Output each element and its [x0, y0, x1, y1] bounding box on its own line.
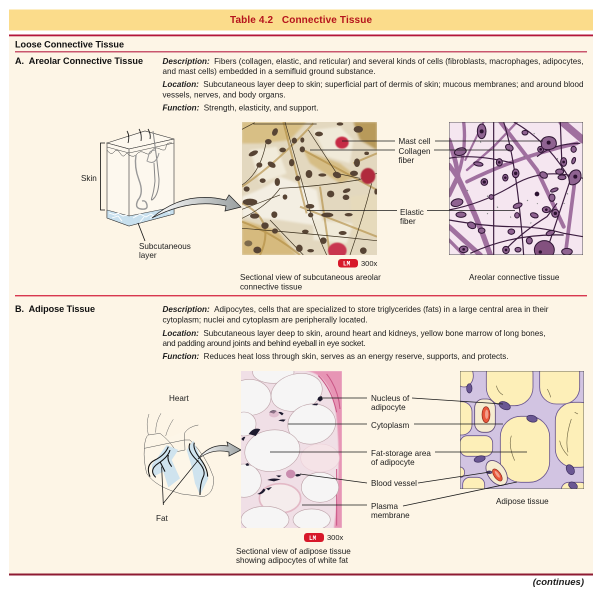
- label: fat: Fat: [156, 514, 168, 523]
- text block: areolar description: [162, 57, 584, 112]
- bracket: [100, 143, 105, 210]
- title banner: [9, 10, 593, 30]
- leader: fat storage: [270, 451, 527, 453]
- label: collagen fiber: fiber: [398, 156, 415, 165]
- label: fat-storage area: Fat-storage area: [371, 449, 431, 458]
- heading: loose connective tissue: Loose Connective Tissue: [15, 40, 124, 50]
- illustration: areolar connective tissue: [449, 122, 583, 259]
- label: collagen fiber: Collagen: [398, 147, 430, 156]
- label: skin: Skin: [81, 174, 97, 183]
- heading rule: [15, 51, 587, 52]
- badge: LM 300x areolar: 300x: [361, 259, 378, 268]
- fat deposits: [152, 445, 180, 487]
- label: elastic fiber: fiber: [400, 217, 416, 226]
- callouts: adipose labels: [270, 398, 527, 506]
- caption: adipose micrograph: Sectional view of adipose tissue: [236, 547, 351, 556]
- skin diagram: [81, 129, 191, 260]
- callouts: areolar labels: [307, 141, 543, 210]
- text block: adipose description: [162, 305, 549, 361]
- photo: areolar micrograph: [242, 122, 378, 259]
- text block: adipose description: Function: Reduces heat loss through skin, serves as an energy reserve, supports, and protects.: [162, 352, 508, 361]
- leader: blood vessel: [300, 472, 490, 483]
- leader: cytoplasm: [288, 423, 503, 425]
- text block: adipose description: and padding around joints and behind eyeball in eye socket.: [162, 339, 366, 348]
- bottom rule: [9, 574, 593, 576]
- fat pointers: [162, 460, 198, 505]
- text block: adipose description: cytoplasm; nuclei and cytoplasm are peripherally located.: [162, 316, 368, 324]
- label: nucleus of adipocyte: Nucleus of: [371, 394, 409, 403]
- text block: areolar description: Function: Strength, elasticity, and support.: [162, 104, 318, 112]
- heart diagram: [144, 394, 214, 523]
- mast cells: [328, 137, 375, 259]
- label: nucleus of adipocyte: adipocyte: [371, 403, 406, 412]
- label: subcutaneous layer: Subcutaneous: [139, 242, 191, 251]
- text block: adipose description: Location: Subcutaneous layer deep to skin, around heart and kidneys, yellow bone marrow of long bones,: [162, 329, 546, 338]
- caption: areolar micrograph: Sectional view of subcutaneous areolar: [240, 273, 381, 282]
- badge: LM 300x adipose: LM: [309, 535, 317, 542]
- label: plasma membrane: Plasma: [371, 502, 398, 511]
- leader: collagen fiber: [310, 149, 510, 151]
- badge: LM 300x areolar: LM: [343, 261, 351, 268]
- section divider: [15, 295, 587, 296]
- illustration: adipose tissue: [460, 371, 584, 489]
- photo: adipose micrograph: [241, 371, 342, 528]
- leader: mast cell: [342, 140, 543, 142]
- caption: adipose illustration: Adipose tissue: [496, 497, 549, 506]
- arrow: skin to micrograph: [152, 195, 241, 218]
- text block: areolar description: and mast cells) embedded in a semifluid ground substance.: [162, 67, 376, 76]
- continues note: (continues): [533, 577, 584, 588]
- subcutaneous layer of skin block: [107, 207, 174, 226]
- heading: adipose tissue: B. Adipose Tissue: [15, 304, 95, 314]
- label: subcutaneous layer: layer: [139, 251, 157, 260]
- leader: elastic fiber: [307, 210, 515, 212]
- arrow: heart to micrograph: [198, 442, 241, 459]
- badge: LM 300x areolar: [338, 259, 378, 268]
- heading: areolar connective tissue: A. Areolar Connective Tissue: [15, 56, 143, 66]
- heart outline: [144, 425, 214, 497]
- badge: LM 300x adipose: 300x: [327, 533, 344, 542]
- label: mast cell: Mast cell: [398, 137, 431, 146]
- text block: areolar description: Description: Fibers (collagen, elastic, and reticular) and several kinds of cells (fibroblasts, macrophages, adipocytes,: [162, 57, 584, 66]
- text block: areolar description: Location: Subcutaneous layer deep to skin; superficial part of dermis of skin; mucous membranes; and around blood: [162, 80, 584, 89]
- caption: areolar micrograph: connective tissue: [240, 282, 303, 292]
- leader: nucleus: [320, 398, 503, 404]
- label: heart: Heart: [169, 394, 190, 403]
- leader: plasma membrane: [302, 482, 517, 506]
- subcutaneous pointer: [138, 223, 145, 241]
- label: cytoplasm: Cytoplasm: [371, 421, 409, 430]
- label: blood vessel: Blood vessel: [371, 479, 417, 488]
- coronary vessels: [148, 447, 172, 477]
- badge: LM 300x adipose: [304, 533, 344, 542]
- label: elastic fiber: Elastic: [400, 208, 424, 217]
- top red rule: [9, 34, 593, 36]
- text block: areolar description: vessels, nerves, and body organs.: [162, 90, 286, 100]
- label: fat-storage area: of adipocyte: [371, 458, 415, 467]
- caption: adipose micrograph: showing adipocytes of white fat: [236, 556, 349, 565]
- title banner: Table 4.2 Connective Tissue: [230, 15, 372, 26]
- text block: adipose description: Description: Adipocytes, cells that are specialized to store triglycerides (fats) in a large central area in their: [162, 305, 549, 314]
- caption: areolar illustration: Areolar connective tissue: [469, 273, 560, 282]
- label: plasma membrane: membrane: [371, 511, 410, 520]
